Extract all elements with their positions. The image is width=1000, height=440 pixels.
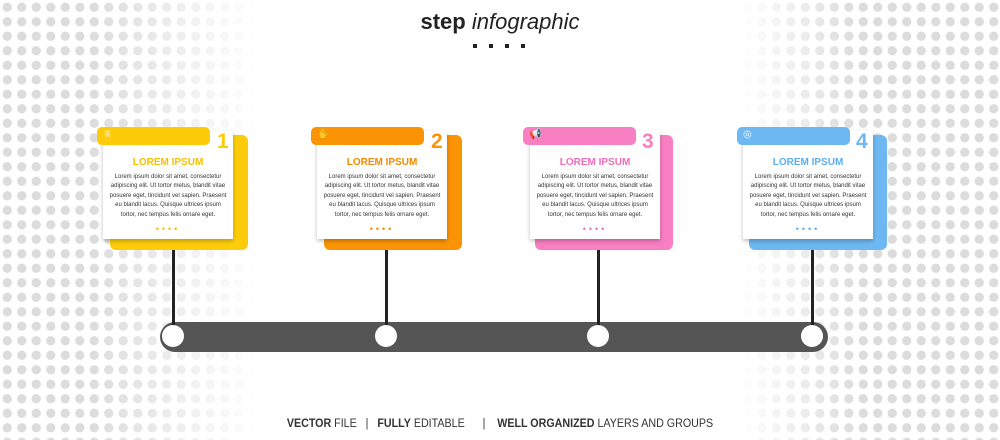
step 2: ✋ <box>317 129 329 140</box>
step 3: Lorem ipsum dolor sit amet, consectetur adipiscing elit. Ut tortor metus, blandit vitae posuere eget, tincidunt vel sapien. Praesent eu blandit lacus. Quisque ultrices ipsum tortor, nec tempus felis ornare eget. <box>537 174 653 218</box>
background dots right <box>772 2 998 440</box>
timeline bar <box>160 322 828 352</box>
number: 1 <box>217 130 229 153</box>
step 4: ◎ <box>743 129 752 140</box>
tab: ♕ <box>103 129 112 140</box>
step 2: LOREM IPSUM <box>347 157 417 168</box>
step 2: 2 <box>431 130 443 153</box>
tab <box>97 127 210 145</box>
step 3: 3 <box>642 130 654 153</box>
step 4: LOREM IPSUM <box>773 157 843 168</box>
title: step infographic <box>420 9 580 34</box>
step 1: •••• <box>156 224 180 234</box>
step 1 <box>97 127 248 347</box>
step 3: LOREM IPSUM <box>560 157 630 168</box>
step 1: Lorem ipsum dolor sit amet, consectetur adipiscing elit. Ut tortor metus, blandit vitae posuere eget, tincidunt vel sapien. Praesent eu blandit lacus. Quisque ultrices ipsum tortor, nec tempus felis ornare eget. <box>110 174 226 218</box>
card back <box>110 135 248 250</box>
footer: VECTOR FILE | FULLY EDITABLE | WELL ORGANIZED LAYERS AND GROUPS <box>287 418 713 430</box>
step 4: 4 <box>856 130 868 153</box>
step 1: LOREM IPSUM <box>133 157 203 168</box>
step 4 <box>737 127 887 347</box>
step 3: 📢 <box>529 129 541 140</box>
step 2 <box>311 127 462 347</box>
step 2: •••• <box>370 224 394 234</box>
step 2: Lorem ipsum dolor sit amet, consectetur adipiscing elit. Ut tortor metus, blandit vitae posuere eget, tincidunt vel sapien. Praesent eu blandit lacus. Quisque ultrices ipsum tortor, nec tempus felis ornare eget. <box>324 174 440 218</box>
step 4: Lorem ipsum dolor sit amet, consectetur adipiscing elit. Ut tortor metus, blandit vitae posuere eget, tincidunt vel sapien. Praesent eu blandit lacus. Quisque ultrices ipsum tortor, nec tempus felis ornare eget. <box>750 174 866 218</box>
step 3: •••• <box>583 224 607 234</box>
title dots <box>473 44 525 48</box>
step 3 <box>523 127 673 347</box>
background dots left <box>2 2 214 440</box>
step 4: •••• <box>796 224 820 234</box>
